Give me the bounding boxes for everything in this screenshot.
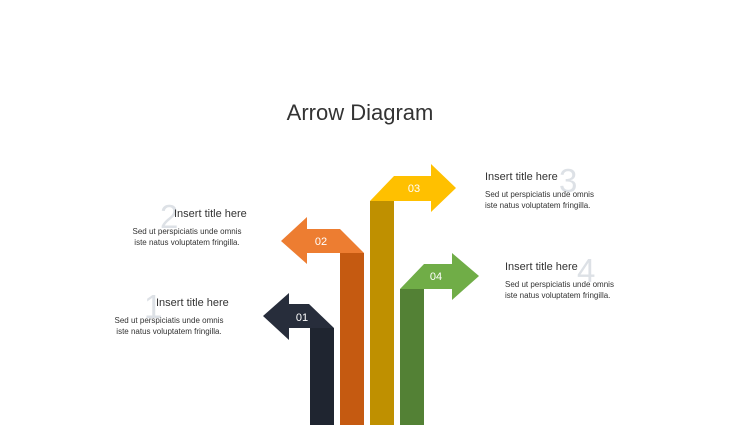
body 4 [505, 280, 614, 300]
text block 4 [505, 252, 614, 300]
arrow 03: 03 [408, 183, 420, 195]
arrow 03 [370, 164, 456, 425]
text block 2 [132, 198, 247, 247]
text block 1 [114, 288, 229, 336]
heading 4: Insert title here [505, 261, 578, 273]
body 1: iste natus voluptatem fringilla. [116, 327, 222, 336]
arrow 02: 02 [315, 236, 327, 248]
arrow 02 [281, 217, 364, 425]
number 2: 2 [160, 198, 178, 235]
number 1: 1 [144, 288, 162, 325]
arrow 04 [400, 253, 479, 425]
body 1 [114, 316, 224, 336]
body 3: Sed ut perspiciatis unde omnis [485, 190, 594, 199]
body 2: iste natus voluptatem fringilla. [134, 238, 240, 247]
body 2: Sed ut perspiciatis unde omnis [133, 227, 241, 236]
heading 3: Insert title here [485, 171, 558, 183]
body 4: iste natus voluptatem fringilla. [505, 291, 610, 300]
arrow 04: 04 [430, 271, 442, 283]
number 4: 4 [577, 252, 595, 289]
body 4: Sed ut perspiciatis unde omnis [505, 280, 614, 289]
number 3: 3 [559, 162, 577, 199]
body 3: iste natus voluptatem fringilla. [485, 201, 590, 210]
arrow 01: 01 [296, 312, 308, 324]
heading 2: Insert title here [174, 208, 247, 220]
arrow 01 [263, 293, 334, 425]
body 3 [485, 190, 594, 210]
text block 3 [485, 162, 594, 210]
body 1: Sed ut perspiciatis unde omnis [115, 316, 223, 325]
title: Arrow Diagram [287, 100, 433, 125]
heading 1: Insert title here [156, 297, 229, 309]
body 2 [132, 227, 242, 247]
